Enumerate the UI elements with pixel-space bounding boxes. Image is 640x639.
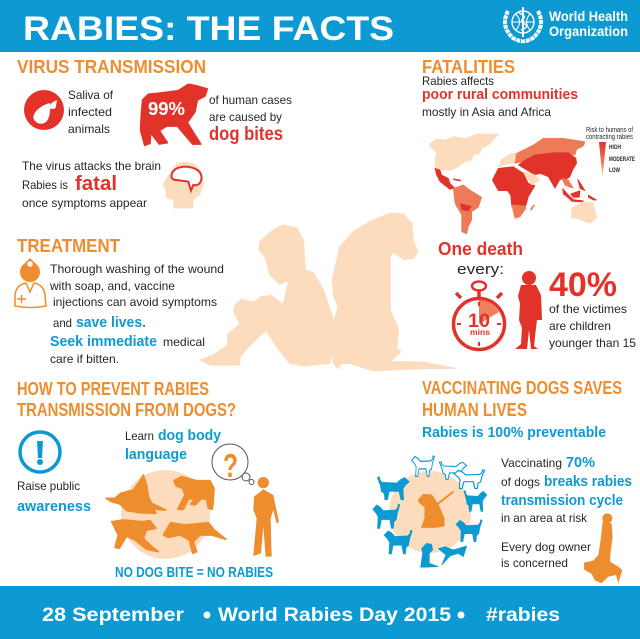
WHO name: World Health [549, 8, 628, 24]
map legend: contracting rabies [586, 134, 633, 141]
WHO name: Organization [549, 23, 628, 39]
text: dog body language: Learn [125, 429, 154, 443]
heading: how to prevent rabies: HOW TO PREVENT RABIES [17, 379, 209, 399]
text: treatment: injections can avoid symptoms [53, 295, 217, 309]
heading: vaccinating dogs [422, 378, 622, 420]
text: brain [22, 159, 161, 210]
text: treatment [49, 262, 224, 366]
thought bubble with question mark: ? [223, 447, 238, 484]
dog ring with vaccinated dog [373, 456, 487, 567]
text: raise public awareness: Raise public [17, 479, 80, 493]
header banner [0, 0, 640, 52]
heading: how to prevent rabies [17, 379, 236, 420]
text: treatment: save lives. [76, 314, 146, 331]
text: one death: One death [438, 239, 523, 259]
text: dog bites: of human cases [209, 93, 292, 107]
icon: red dog with 99%: 99% [148, 99, 185, 119]
text: one death: every: [457, 261, 504, 278]
thought bubble with question mark [212, 444, 254, 484]
icon: woman walking dog [584, 513, 622, 583]
text: treatment: Seek immediate [50, 333, 157, 350]
text: dog bites: dog bites [209, 124, 283, 145]
text: brain: once symptoms appear [22, 196, 147, 210]
text: vaccinating 70%: Vaccinating [501, 456, 562, 470]
icon: stopwatch: 10 [468, 311, 490, 332]
text: treatment: and [53, 316, 72, 330]
text: treatment: Thorough washing of the wound [50, 262, 224, 276]
icon: exclamation [20, 432, 60, 472]
text: saliva: infected [68, 105, 112, 119]
heading: vaccinating dogs: HUMAN LIVES [422, 400, 527, 420]
text: vaccinating 70%: in an area at risk [501, 511, 588, 525]
footer banner [0, 586, 640, 639]
slogan: NO DOG BITE = NO RABIES [115, 564, 273, 581]
text: 40% victims: younger than 15 [549, 336, 636, 350]
map legend: HIGH [609, 145, 621, 151]
subheading: preventable: Rabies is 100% preventable [422, 424, 606, 441]
heading: treatment: TREATMENT [17, 236, 120, 256]
date: 28 September [42, 605, 185, 626]
event name: World Rabies Day 2015 [218, 605, 451, 626]
text: poor rural communities: poor rural communities [422, 86, 578, 103]
icon: WHO emblem [505, 7, 541, 41]
text: dog bites [209, 93, 292, 145]
text: poor rural communities: Rabies affects [422, 74, 494, 88]
heading: how to prevent rabies: TRANSMISSION FROM DOGS? [17, 400, 236, 420]
heading: virus transmission: VIRUS TRANSMISSION [17, 57, 206, 77]
panel: how to prevent [17, 379, 279, 581]
text: saliva: animals [68, 122, 110, 136]
icon: boy orange [253, 477, 279, 557]
text: poor rural communities [422, 74, 578, 119]
heading: fatalities: FATALITIES [422, 57, 515, 77]
icon: stopwatch [454, 282, 504, 350]
text: treatment: medical [163, 335, 205, 349]
text: vaccinating 70%: Every dog owner [501, 540, 591, 554]
WHO name [549, 8, 628, 39]
panel: vaccinating dogs [373, 378, 632, 583]
text: dog body language [125, 427, 222, 463]
text: one death [438, 239, 523, 278]
icon: saliva drops [24, 90, 64, 130]
text: dog body language: dog body [158, 427, 222, 444]
text: 40% victims: 40% [549, 266, 617, 304]
text: treatment: care if bitten. [50, 352, 119, 366]
map legend: LOW [609, 168, 620, 174]
icon: red dog with 99% [141, 84, 207, 145]
text: 40% victims: are children [549, 319, 611, 333]
icon: child silhouette [515, 271, 542, 349]
icon: doctor [15, 258, 46, 308]
icon: head with brain [162, 162, 203, 208]
text: 40% victims: of the victimes [549, 302, 627, 316]
text: raise public awareness: awareness [17, 498, 91, 515]
title: RABIES: THE FACTS [23, 10, 394, 48]
text: vaccinating 70%: transmission cycle [501, 492, 623, 509]
panel: fatalities [422, 57, 636, 350]
text: vaccinating 70%: of dogs [501, 475, 540, 489]
text: saliva [68, 88, 114, 136]
text: saliva: Saliva of [68, 88, 114, 102]
silhouette: boy and dog [201, 213, 455, 371]
panel: virus transmission [17, 57, 292, 210]
world risk map [429, 134, 597, 234]
text: brain: Rabies is [22, 178, 68, 192]
text: dog bites: are caused by [209, 110, 282, 124]
circle with four dogs [106, 470, 226, 559]
map legend [586, 127, 635, 178]
hashtag: #rabies [486, 605, 560, 626]
panel: treatment [15, 236, 224, 366]
text: vaccinating 70%: 70% [566, 454, 595, 471]
text: brain: fatal [75, 173, 117, 195]
text: raise public awareness [17, 479, 91, 515]
text: vaccinating 70%: breaks rabies [544, 473, 632, 490]
text: 40% victims [549, 266, 636, 350]
text: vaccinating 70% [501, 454, 632, 570]
icon: stopwatch: mins [470, 328, 491, 337]
text: poor rural communities: mostly in Asia and Africa [422, 105, 551, 119]
text: brain: The virus attacks the brain [22, 159, 161, 173]
text: dog body language: language [125, 446, 187, 463]
text: treatment: with soap, and, vaccine [49, 279, 175, 293]
text: vaccinating 70%: is concerned [501, 556, 568, 570]
